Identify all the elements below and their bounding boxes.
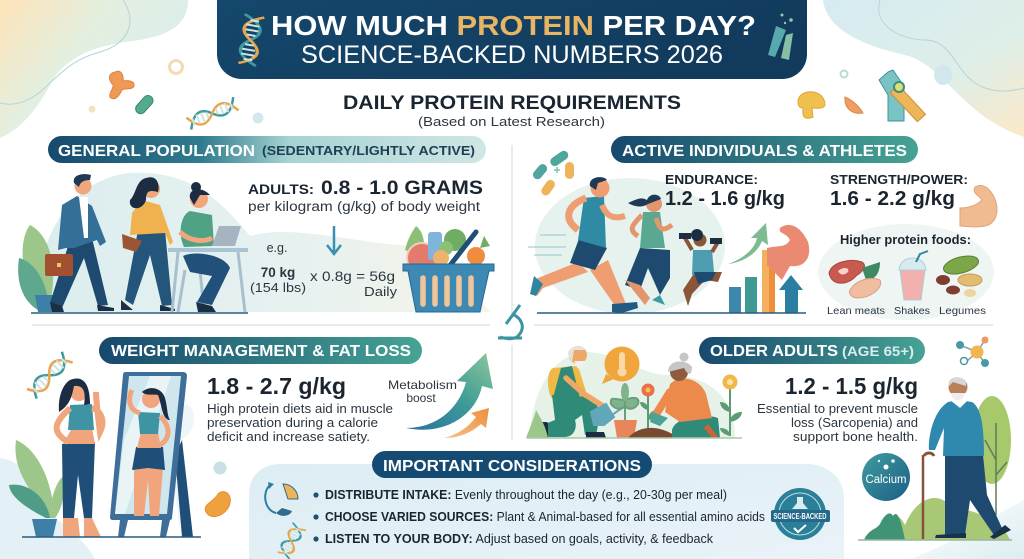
- higher protein foods box: Higher protein foods:: [840, 233, 971, 247]
- panel: older adults: [526, 336, 1012, 540]
- metabolism boost label: boost: [406, 391, 436, 405]
- heading: general population: (SEDENTARY/LIGHTLY ACTIVE): [262, 144, 475, 158]
- illustration: potted plant and flower: [611, 383, 678, 438]
- section dividers: [32, 145, 993, 440]
- weight management value and text: 1.8 - 2.7 g/kg: [207, 373, 346, 399]
- icon: legumes: [936, 253, 982, 297]
- subheading: [343, 92, 681, 129]
- icon: bean: [205, 492, 230, 517]
- title text: SCIENCE-BACKED NUMBERS 2026: [301, 41, 723, 69]
- endurance numbers: 1.2 - 1.6 g/kg: [665, 188, 785, 210]
- illustration: gardening woman: [650, 352, 720, 438]
- heading: general population: [48, 136, 486, 163]
- heading: weight management: WEIGHT MANAGEMENT & FAT LOSS: [111, 343, 411, 360]
- daily protein range: ADULTS:: [248, 181, 314, 197]
- daily protein range: per kilogram (g/kg) of body weight: [248, 199, 480, 214]
- heading: older adults: (AGE 65+): [842, 343, 914, 359]
- illustration: man with briefcase: [45, 174, 114, 312]
- icon: supplement pills: [531, 149, 574, 197]
- worked example: x 0.8g = 56g: [310, 269, 395, 284]
- badge: science-backed: [771, 488, 830, 540]
- illustration: standing mirror: [110, 372, 193, 537]
- weight management value and text: High protein diets aid in muscle: [207, 402, 393, 416]
- decorative science icons left: [88, 60, 264, 130]
- heading: weight management: [99, 337, 422, 364]
- icon: DNA helix in banner: [236, 14, 264, 66]
- icon: food basket: [403, 226, 494, 312]
- icon: calcium circle: Calcium: [866, 474, 906, 486]
- icon: DNA helix: [26, 352, 73, 399]
- heading: important considerations: [372, 451, 652, 478]
- worked example: Daily: [364, 285, 398, 299]
- icon: flexed arm: [960, 185, 997, 227]
- badge: science-backed: SCIENCE-BACKED: [774, 512, 827, 521]
- heading: important considerations: IMPORTANT CONSIDERATIONS: [383, 458, 641, 475]
- illustration: female runner: [625, 195, 672, 305]
- illustration: woman at laptop: [168, 182, 248, 312]
- illustration: male runner: [528, 177, 638, 313]
- background shape: [530, 352, 735, 438]
- heading: active individuals: ACTIVE INDIVIDUALS & ATHLETES: [622, 143, 907, 160]
- panel: general population: [18, 136, 494, 313]
- panel background: [249, 464, 844, 559]
- soft background shape: [38, 173, 490, 312]
- older adults value and text: 1.2 - 1.5 g/kg: [785, 373, 918, 399]
- worked example: [250, 241, 398, 299]
- icon: thermometer bubble: [602, 346, 640, 384]
- illustration: plant: [18, 225, 54, 312]
- considerations list: [313, 488, 765, 546]
- older adults value and text: [757, 373, 918, 444]
- illustration: plant and pot: [9, 440, 65, 537]
- daily protein range: 0.8 - 1.0 GRAMS: [321, 177, 483, 199]
- illustration: gardening man: [540, 346, 606, 438]
- icon: test tubes: [768, 14, 793, 60]
- weight management value and text: [207, 373, 393, 444]
- daily protein range: [248, 177, 483, 214]
- illustration: walking woman: [121, 177, 175, 311]
- weight management value and text: preservation during a calorie: [207, 416, 378, 430]
- metabolism boost label: Metabolism: [388, 378, 457, 392]
- metabolism boost label: [388, 378, 457, 405]
- considerations list: LISTEN TO YOUR BODY: Adjust based on goals, activity, & feedback: [325, 532, 714, 546]
- strength numbers: STRENGTH/POWER:: [830, 172, 968, 187]
- strength numbers: [830, 172, 968, 210]
- icon: watering can: [591, 404, 622, 425]
- endurance numbers: [665, 172, 785, 210]
- panel: active individuals and athletes: [528, 136, 997, 320]
- icon: DNA small: [276, 523, 306, 559]
- higher protein foods box: Lean meats: [827, 305, 885, 317]
- icon: calcium circle: [862, 453, 910, 501]
- older adults value and text: Essential to prevent muscle: [757, 402, 918, 416]
- icon: molecule: [956, 336, 989, 367]
- illustration: yellow flower: [526, 374, 742, 438]
- chart: rising bars: [728, 223, 809, 313]
- subheading: (Based on Latest Research): [418, 114, 605, 129]
- illustration: woman: [57, 378, 102, 537]
- older adults value and text: loss (Sarcopenia) and: [791, 416, 918, 430]
- icon: meal timing cycle: [265, 482, 298, 516]
- higher protein foods box: Shakes: [894, 305, 930, 317]
- illustration: older man with cane: [858, 377, 1012, 540]
- older adults value and text: support bone health.: [793, 430, 918, 444]
- icon: protein shake: [899, 251, 928, 300]
- illustration: child with dumbbells: [679, 229, 722, 306]
- heading: older adults: OLDER ADULTS: [710, 343, 838, 360]
- subheading: DAILY PROTEIN REQUIREMENTS: [343, 92, 681, 114]
- title text: HOW MUCH PROTEIN PER DAY?: [271, 10, 756, 41]
- mirror reflection: [130, 388, 170, 516]
- panel: weight management and fat loss: [9, 337, 493, 537]
- icon: lean meats: [829, 260, 881, 298]
- arrow: metabolism boost: [406, 353, 493, 438]
- endurance numbers: ENDURANCE:: [665, 172, 758, 187]
- icon: microscope: [498, 305, 522, 339]
- worked example: 70 kg: [261, 265, 295, 280]
- worked example: e.g.: [267, 241, 287, 255]
- higher protein foods box: [818, 224, 994, 320]
- strength numbers: 1.6 - 2.2 g/kg: [830, 188, 955, 210]
- title text: [271, 10, 756, 69]
- heading: general population: GENERAL POPULATION: [58, 143, 255, 160]
- decorative food and measuring icons right: [798, 65, 952, 122]
- considerations list: CHOOSE VARIED SOURCES: Plant & Animal-based for all essential amino acids: [325, 510, 765, 524]
- heading: active individuals: [611, 136, 918, 163]
- weight management value and text: deficit and increase satiety.: [207, 430, 370, 444]
- considerations list: DISTRIBUTE INTAKE: Evenly throughout the day (e.g., 20-30g per meal): [325, 488, 727, 502]
- higher protein foods box: Legumes: [939, 305, 986, 317]
- worked example: (154 lbs): [250, 280, 306, 295]
- panel: important considerations: [249, 451, 844, 559]
- title banner: [217, 0, 807, 79]
- background circle: [535, 178, 725, 314]
- arrow: down: [327, 226, 341, 254]
- heading: older adults: [699, 337, 925, 364]
